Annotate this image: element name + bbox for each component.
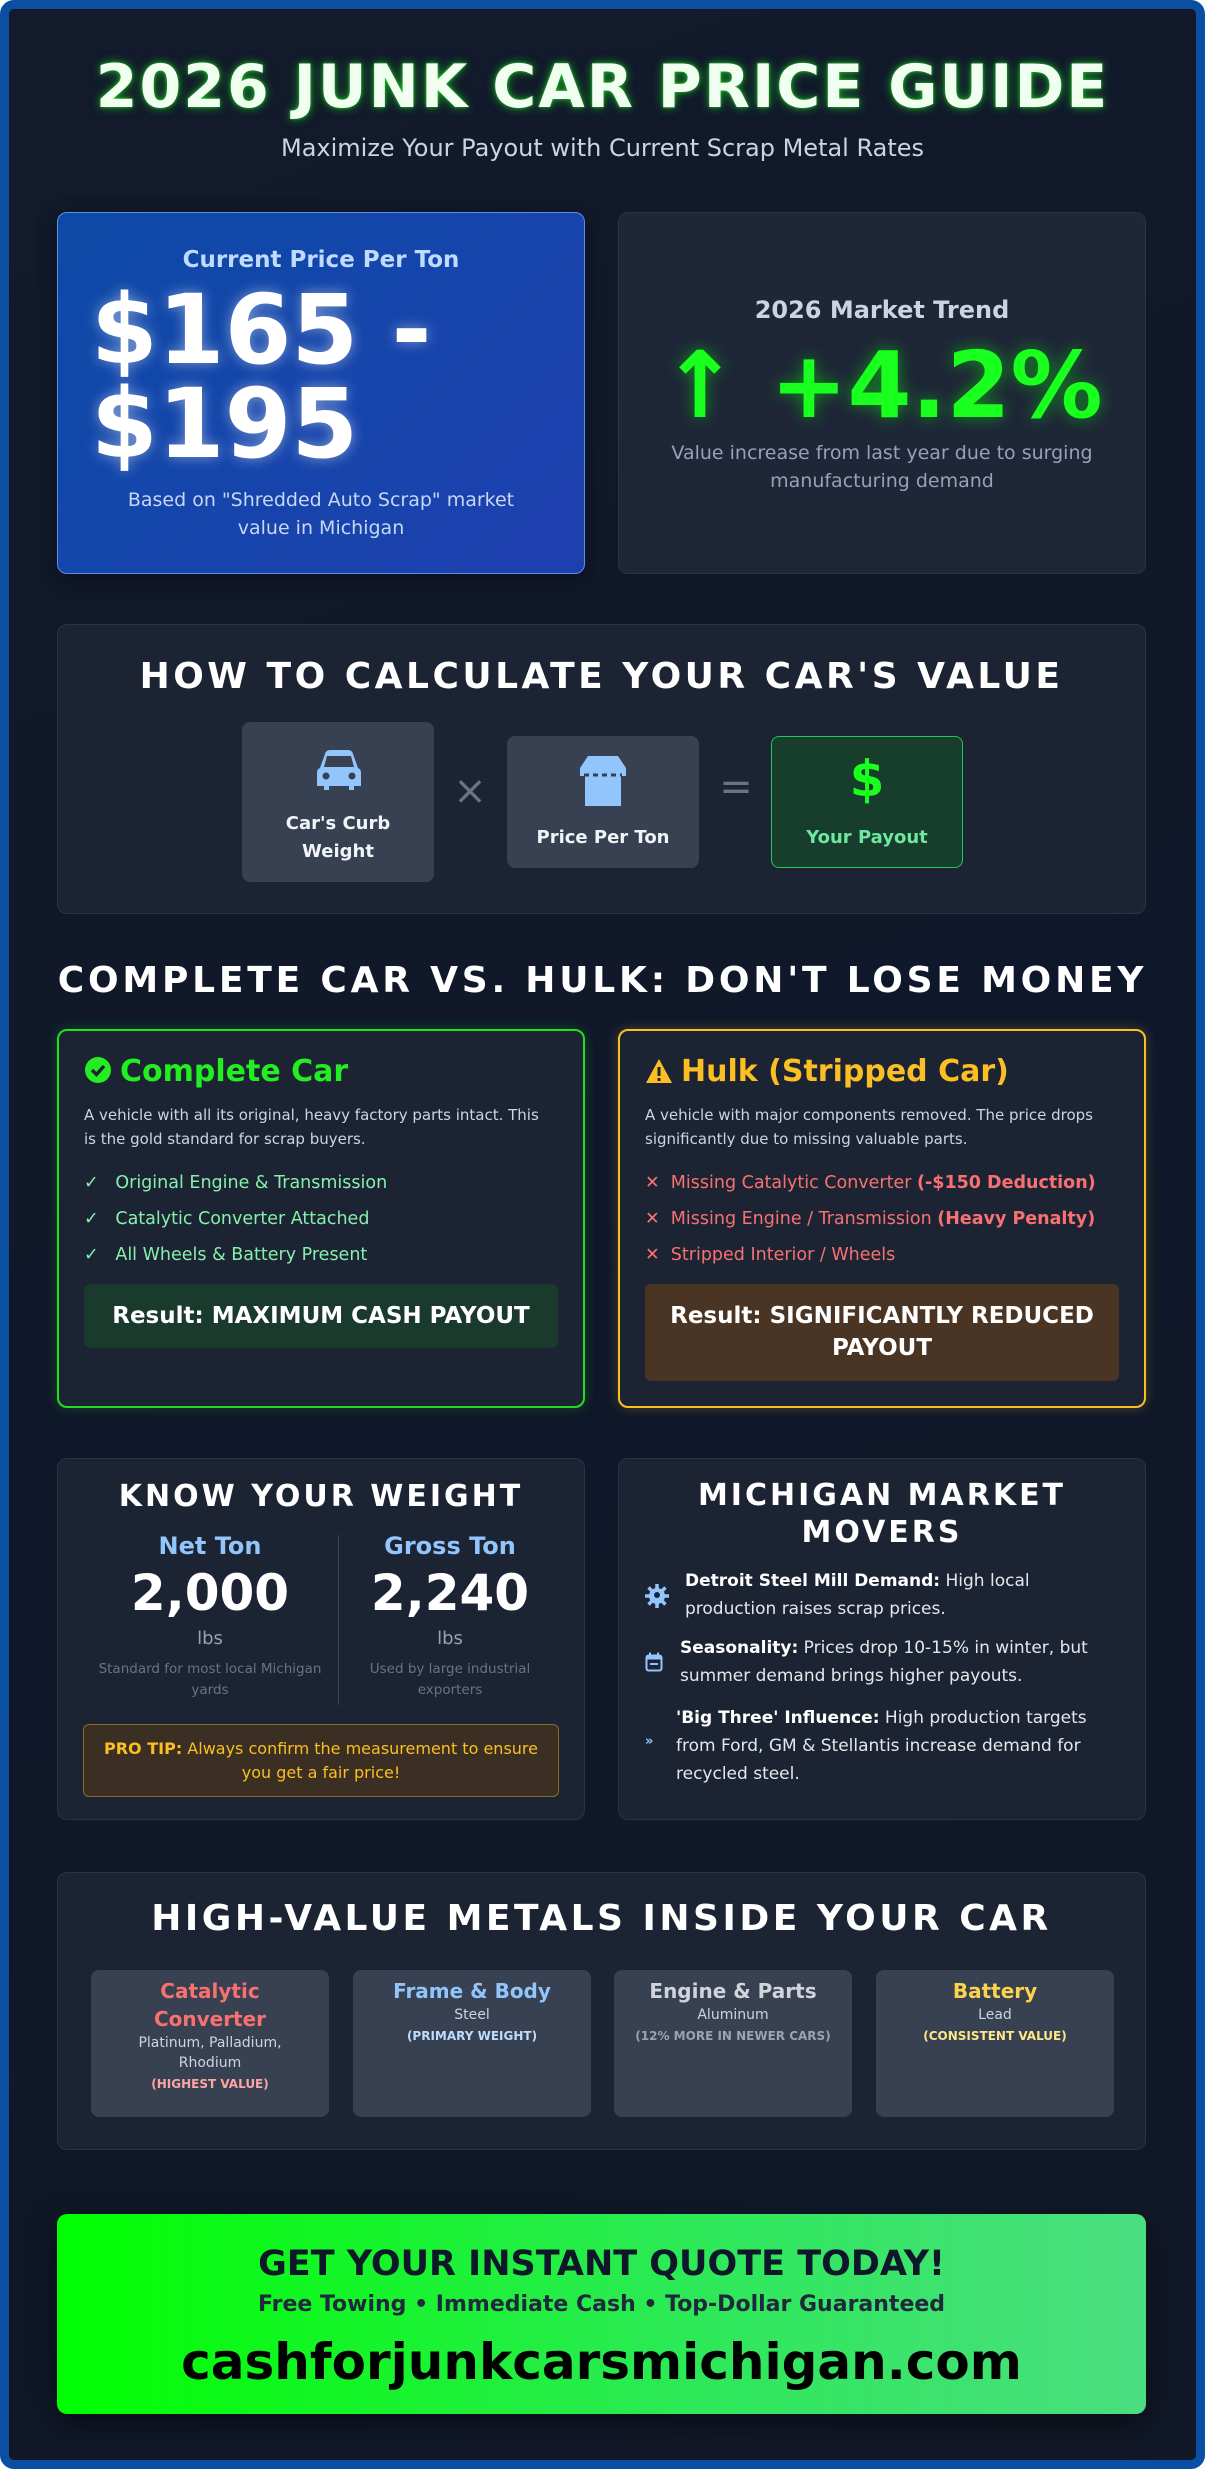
item: big three: 'Big Three' Influence: High production targets from Ford, GM & Stellantis increase demand for recycled steel.: [676, 1708, 1087, 1784]
label: your payout: Your Payout: [806, 827, 928, 848]
result: maximum payout: [84, 1284, 558, 1348]
pro tip: [83, 1724, 559, 1797]
trend value: ↑ +4.2%: [661, 332, 1103, 439]
label: curb weight: Car's Curb: [286, 813, 390, 834]
metal: engine & parts: [614, 1970, 852, 2117]
metal: engine & parts: Aluminum: [697, 2007, 769, 2023]
gross ton column: [370, 1532, 530, 1698]
icon: warning: [646, 1059, 672, 1083]
metal: catalytic converter: Catalytic: [160, 1979, 260, 2003]
metal: battery: Battery: [953, 1979, 1037, 2003]
label: curb weight: Weight: [302, 841, 374, 862]
net ton column: [99, 1532, 321, 1698]
label: price per ton: Price Per Ton: [536, 827, 670, 848]
heading: metals: HIGH-VALUE METALS INSIDE YOUR CAR: [151, 1898, 1052, 1939]
metal: engine & parts: (12% MORE IN NEWER CARS): [635, 2029, 831, 2043]
trend heading: 2026 Market Trend: [755, 296, 1009, 324]
operator: equals: =: [719, 764, 753, 810]
icon: dollar: $: [850, 750, 884, 808]
metal: frame & body: [353, 1970, 591, 2117]
panel: market trend: [618, 212, 1146, 574]
metal: catalytic converter: Converter: [154, 2007, 266, 2031]
hulk missing list: ✕ Stripped Interior / Wheels: [645, 1245, 895, 1265]
result: reduced payout: [645, 1284, 1119, 1381]
big price: $195: [91, 368, 358, 480]
icon: check circle: [85, 1057, 111, 1083]
panel: michigan market movers: [618, 1458, 1146, 1820]
complete car description: A vehicle with all its original, heavy factory parts intact. This is the gold standard for scrap buyers.: [84, 1106, 539, 1148]
hulk missing list: [645, 1173, 1096, 1265]
result: maximum payout: Result: MAXIMUM CASH PAYOUT: [112, 1303, 530, 1329]
net ton column: 2,000: [131, 1564, 289, 1622]
divider: [338, 1535, 339, 1705]
metal: catalytic converter: [91, 1970, 329, 2117]
cta url: cashforjunkcarsmichigan.com: [181, 2333, 1022, 2391]
complete car title: Complete Car: [120, 1054, 348, 1089]
icon: gear: [645, 1584, 669, 1608]
hulk title: Hulk (Stripped Car): [681, 1054, 1009, 1089]
trend description: Value increase from last year due to surging manufacturing demand: [671, 442, 1093, 492]
gross ton column: lbs: [437, 1628, 463, 1649]
call to action: [57, 2214, 1146, 2414]
gross ton column: Gross Ton: [384, 1532, 516, 1560]
metal: battery: (CONSISTENT VALUE): [923, 2029, 1067, 2043]
metal: frame & body: Frame & Body: [393, 1979, 551, 2003]
cta benefits: Free Towing • Immediate Cash • Top-Dollar Guaranteed: [258, 2292, 945, 2317]
metal: catalytic converter: Platinum, Palladium,: [138, 2035, 282, 2051]
result: reduced payout: Result: SIGNIFICANTLY REDUCED PAYOUT: [670, 1303, 1094, 1361]
step: your payout: [771, 736, 963, 868]
icon: people: »: [645, 1734, 653, 1749]
icon: calendar: [646, 1652, 662, 1672]
net ton column: Standard for most local Michigan yards: [99, 1661, 321, 1698]
step: price per ton: [507, 736, 699, 868]
hulk missing list: ✕ Missing Catalytic Converter (-$150 Deduction): [645, 1173, 1096, 1193]
panel: high-value metals: [57, 1872, 1146, 2150]
heading: complete vs hulk: COMPLETE CAR VS. HULK: DON'T LOSE MONEY: [58, 960, 1147, 1001]
icon: car: [317, 750, 361, 790]
metal: engine & parts: Engine & Parts: [649, 1979, 817, 2003]
big price: [90, 274, 434, 480]
heading: how to calculate: HOW TO CALCULATE YOUR CAR'S VALUE: [140, 656, 1063, 697]
gross ton column: Used by large industrial exporters: [370, 1661, 530, 1698]
metal: catalytic converter: (HIGHEST VALUE): [151, 2077, 269, 2091]
hulk description: A vehicle with major components removed. The price drops significantly due to missing valuable parts.: [645, 1106, 1093, 1148]
metal: frame & body: Steel: [454, 2007, 490, 2023]
step: curb weight: [242, 722, 434, 882]
cta heading: GET YOUR INSTANT QUOTE TODAY!: [258, 2244, 945, 2284]
label: curb weight: [286, 813, 390, 862]
metal: battery: Lead: [978, 2007, 1012, 2023]
price note: Based on "Shredded Auto Scrap" market value in Michigan: [128, 489, 514, 539]
complete car checklist: [84, 1173, 387, 1265]
title: 2026 JUNK CAR PRICE GUIDE: [96, 52, 1109, 122]
icon: store: [580, 756, 626, 806]
pro tip: PRO TIP: Always confirm the measurement to ensure you get a fair price!: [104, 1739, 538, 1782]
operator: times: ×: [453, 768, 487, 814]
hulk missing list: ✕ Missing Engine / Transmission (Heavy Penalty): [645, 1209, 1095, 1229]
panel: complete car: [57, 1029, 585, 1408]
panel: know your weight: [57, 1458, 585, 1820]
metal: catalytic converter: Rhodium: [179, 2055, 241, 2071]
complete car checklist: ✓ Original Engine & Transmission: [84, 1173, 387, 1193]
heading: current price per ton: Current Price Per Ton: [183, 247, 459, 273]
big price: $165 -: [91, 274, 431, 386]
panel: hulk: [618, 1029, 1146, 1408]
heading: know your weight: KNOW YOUR WEIGHT: [119, 1479, 523, 1514]
metal: frame & body: (PRIMARY WEIGHT): [407, 2029, 537, 2043]
complete car checklist: ✓ Catalytic Converter Attached: [84, 1209, 369, 1229]
net ton column: Net Ton: [159, 1532, 261, 1560]
heading: market movers: MICHIGAN MARKET MOVERS: [698, 1478, 1066, 1550]
complete car checklist: ✓ All Wheels & Battery Present: [84, 1245, 367, 1265]
subtitle: Maximize Your Payout with Current Scrap Metal Rates: [281, 134, 924, 162]
panel: how to calculate: [57, 624, 1146, 914]
panel: current price per ton: [57, 212, 585, 574]
net ton column: lbs: [197, 1628, 223, 1649]
item: steel mill demand: Detroit Steel Mill Demand: High local production raises scrap prices.: [685, 1571, 1030, 1619]
metal: battery: [876, 1970, 1114, 2117]
gross ton column: 2,240: [371, 1564, 529, 1622]
item: seasonality: Seasonality: Prices drop 10-15% in winter, but summer demand brings higher payouts.: [680, 1638, 1088, 1686]
